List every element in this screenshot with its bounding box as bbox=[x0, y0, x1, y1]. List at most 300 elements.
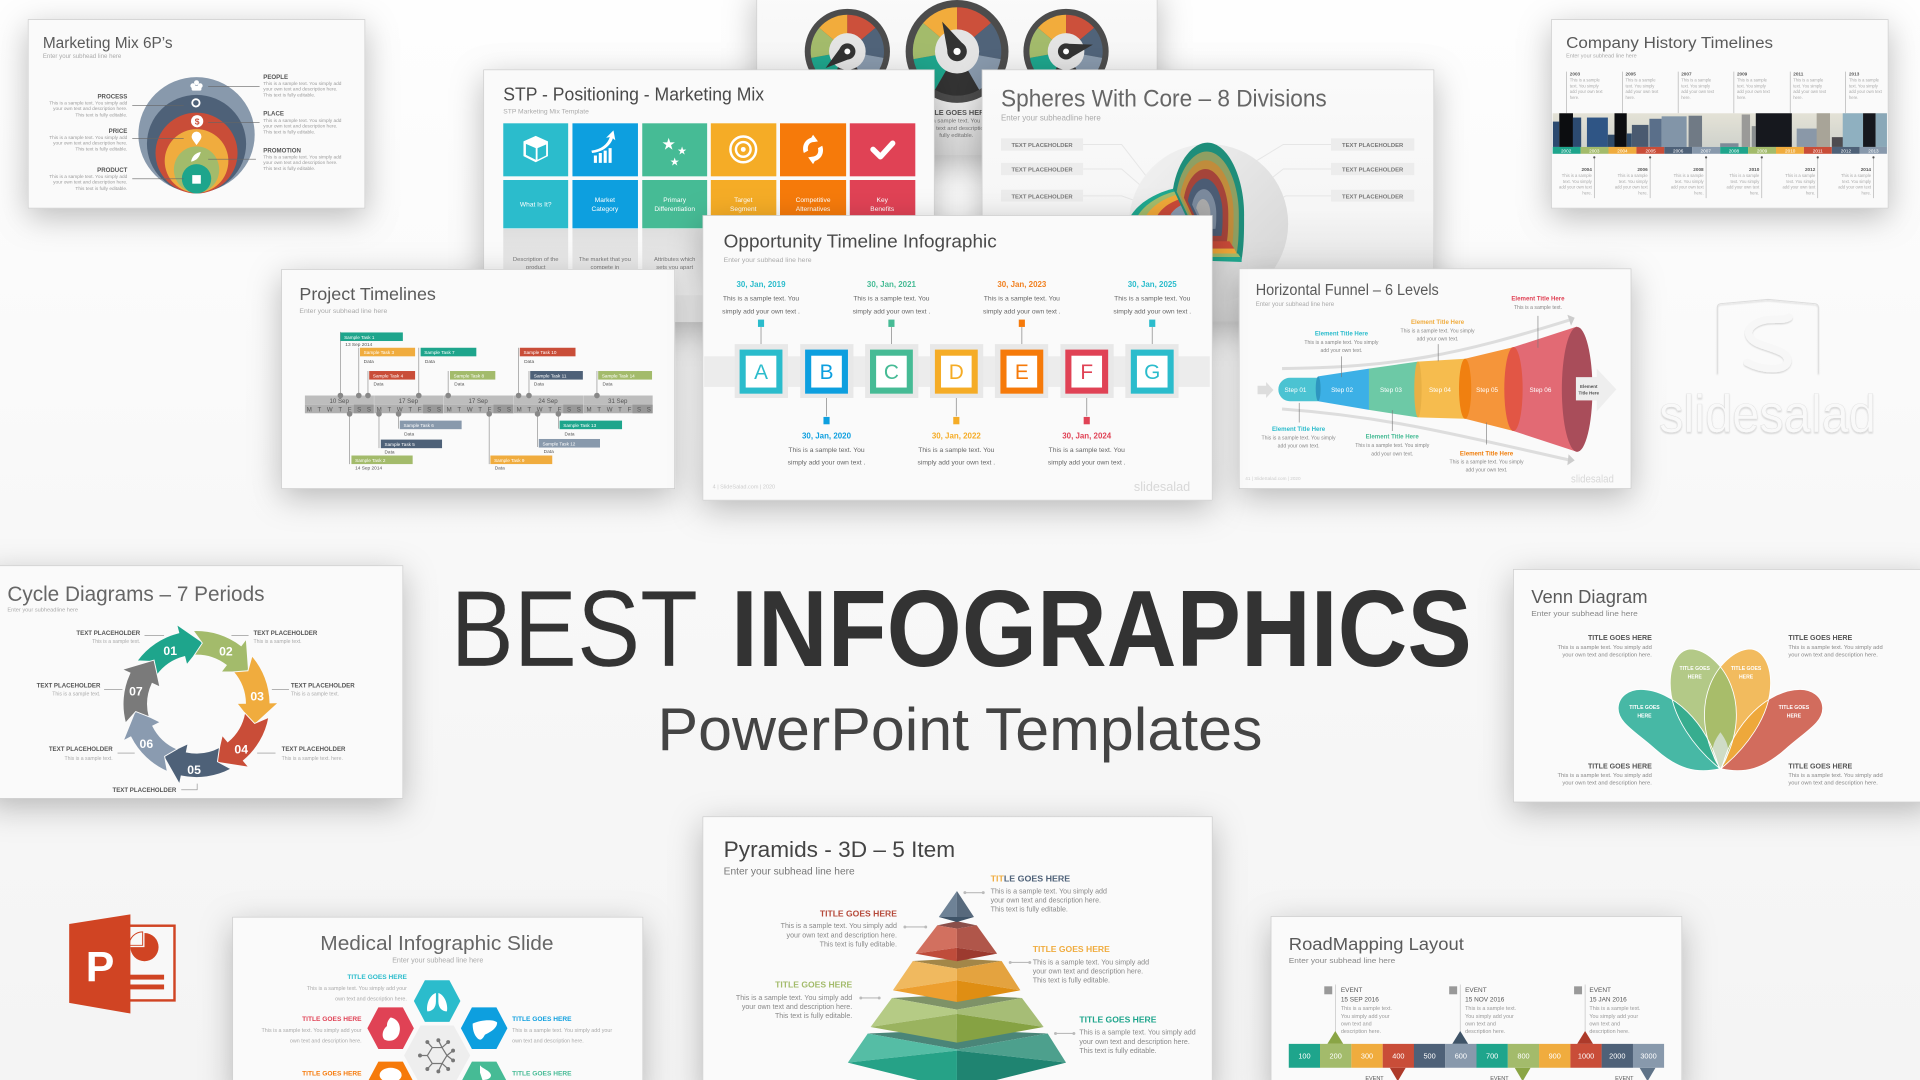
top timeline entries: add your own text bbox=[1681, 89, 1715, 94]
pyramid captions: This is a sample text. You simply add bbox=[1033, 958, 1149, 966]
bottom timeline entries: This is a sample bbox=[1674, 173, 1704, 178]
bottom timeline entries: here. bbox=[1806, 191, 1815, 196]
project timelines subheading: Enter your subhead line here bbox=[299, 308, 387, 315]
cycle labels: This is a sample text. bbox=[253, 639, 302, 645]
top timeline entries: This is a sample bbox=[1849, 77, 1880, 82]
STP subheading: STP Marketing Mix Template bbox=[503, 108, 589, 115]
bottom timeline entries: here. bbox=[1862, 191, 1871, 196]
STP icon tiles: ★ bbox=[670, 156, 680, 168]
right side labels: PEOPLE bbox=[263, 74, 288, 81]
roadmap subheading: Enter your subhead line here bbox=[1289, 956, 1395, 965]
upper date captions: 30, Jan, 2025 bbox=[1128, 280, 1177, 289]
funnel bottom callouts: This is a sample text. You simply bbox=[1355, 443, 1430, 449]
roadmap events bbox=[1324, 984, 1641, 1035]
top timeline entries: 2013 bbox=[1849, 71, 1860, 76]
right side labels bbox=[208, 74, 342, 172]
gauge caption bbox=[911, 108, 1002, 139]
pyramid captions: TITLE GOES HERE bbox=[1079, 1014, 1157, 1024]
left side labels: PROCESS bbox=[97, 94, 127, 101]
upper task bars: Data bbox=[454, 382, 465, 388]
lower task bars: Data bbox=[495, 466, 505, 472]
pyramid captions: This is a sample text. You simply add bbox=[991, 887, 1107, 895]
cycle labels: TEXT PLACEHOLDER bbox=[76, 630, 141, 637]
upper task bars: Sample Task 11 bbox=[534, 373, 567, 378]
STP description columns: Attributes which bbox=[654, 257, 695, 263]
medical subheading: Enter your subhead line here bbox=[392, 956, 483, 964]
top timeline entries: text. You simply bbox=[1793, 83, 1823, 88]
calendar axis: MTWTFSSMTWTFSSMTWTFSSMTWTFSSMTWTFSS bbox=[307, 406, 651, 413]
calendar axis: 17 Sep bbox=[468, 398, 488, 405]
funnel bottom callouts: Element Title Here bbox=[1366, 433, 1419, 440]
panel: gauges slide bbox=[757, 0, 1157, 156]
cycle heading: Cycle Diagrams – 7 Periods bbox=[7, 583, 264, 606]
upper date captions: This is a sample text. You bbox=[853, 296, 930, 303]
STP heading: STP - Positioning - Marketing Mix bbox=[503, 83, 764, 104]
funnel bottom callouts: add your own text. bbox=[1278, 444, 1320, 450]
left side labels: This text is fully editable. bbox=[75, 112, 127, 118]
panel: cycle diagrams bbox=[0, 566, 403, 798]
top timeline entries: text. You simply bbox=[1737, 83, 1767, 88]
upper date captions: 30, Jan, 2023 bbox=[997, 280, 1047, 289]
upper date captions bbox=[722, 280, 1191, 315]
STP label tiles: Segment bbox=[730, 206, 757, 213]
roadmap events: This is a sample text. bbox=[1341, 1006, 1392, 1012]
left side labels: your own text and description here. bbox=[53, 140, 127, 146]
letter tiles A to G: F bbox=[1080, 361, 1093, 384]
year colour strip: 2005 bbox=[1645, 148, 1656, 153]
year colour strip: 2007 bbox=[1701, 148, 1711, 153]
roadmap value bar: 200 bbox=[1330, 1052, 1342, 1061]
bottom timeline entries: text. You simply bbox=[1842, 179, 1872, 184]
pyramid captions: your own text and description here. bbox=[787, 931, 897, 939]
lower date captions bbox=[788, 431, 1126, 467]
tier 3 orange bbox=[893, 959, 1020, 1002]
funnel stages: Step 06 bbox=[1529, 387, 1552, 394]
project timelines heading: Project Timelines bbox=[299, 284, 436, 304]
bottom timeline entries: 2006 bbox=[1637, 167, 1648, 172]
roadmap heading: RoadMapping Layout bbox=[1289, 934, 1464, 954]
cycle ring arrows: 05 bbox=[187, 763, 201, 777]
panel: roadmapping layout bbox=[1271, 917, 1682, 1080]
STP description columns bbox=[503, 229, 915, 295]
medical captions: TITLE GOES HERE bbox=[302, 1016, 362, 1023]
roadmap events: This is a sample text. bbox=[1589, 1006, 1641, 1012]
roadmap events: own text and bbox=[1465, 1021, 1496, 1027]
top timeline entries: here. bbox=[1626, 95, 1635, 100]
opportunity watermark: slidesalad bbox=[1134, 479, 1190, 494]
STP label tiles: Differentiation bbox=[654, 206, 695, 213]
bottom timeline entries: 2014 bbox=[1861, 167, 1871, 172]
venn captions bbox=[1558, 634, 1883, 786]
right side labels: This text is fully editable. bbox=[263, 93, 315, 99]
opportunity subheading: Enter your subhead line here bbox=[724, 257, 812, 264]
venn captions: This is a sample text. You simply add bbox=[1558, 645, 1652, 651]
sphere labels: TEXT PLACEHOLDER bbox=[1342, 194, 1404, 200]
calendar axis: 31 Sep bbox=[608, 398, 628, 405]
pyramid heading: Pyramids - 3D – 5 Item bbox=[724, 837, 955, 862]
left side labels: This text is fully editable. bbox=[75, 186, 127, 192]
letter tiles A to G: A bbox=[754, 361, 768, 384]
upper task bars: Sample Task 7 bbox=[424, 350, 455, 355]
STP icon tiles bbox=[503, 123, 915, 176]
STP label tiles: Target bbox=[734, 197, 753, 204]
funnel bottom callouts: This is a sample text. You simply bbox=[1262, 436, 1336, 442]
right side labels: PROMOTION bbox=[263, 147, 301, 154]
tier 5 teal bbox=[848, 1030, 1066, 1080]
roadmap value bar: 900 bbox=[1549, 1052, 1561, 1061]
pyramid captions: your own text and description here. bbox=[742, 1003, 852, 1011]
top timeline entries: add your own text bbox=[1626, 89, 1659, 94]
bottom timeline entries: add your own text bbox=[1782, 185, 1816, 190]
bottom timeline entries: here. bbox=[1750, 191, 1759, 196]
bottom timeline entries: text. You simply bbox=[1730, 179, 1760, 184]
right side labels: your own text and description here. bbox=[263, 123, 337, 129]
panel: medical infographic bbox=[233, 917, 643, 1080]
lower task bars: Data bbox=[544, 449, 554, 455]
left side labels: This is a sample text. You simply add bbox=[49, 174, 128, 180]
funnel footer: 41 | SlideSalad.com | 2020 bbox=[1245, 476, 1301, 481]
cycle labels bbox=[37, 630, 355, 794]
sphere labels: TEXT PLACEHOLDER bbox=[1011, 143, 1073, 149]
letter tiles A to G: D bbox=[949, 361, 964, 384]
top timeline entries: here. bbox=[1793, 95, 1803, 100]
sphere with cut-away core bbox=[1129, 143, 1288, 303]
STP label tiles: Alternatives bbox=[796, 206, 831, 213]
top timeline entries: text. You simply bbox=[1681, 83, 1711, 88]
roadmap value bar: 2000 bbox=[1609, 1052, 1625, 1061]
roadmap events: You simply add your bbox=[1589, 1014, 1638, 1020]
top timeline entries: add your own text bbox=[1570, 89, 1603, 94]
bottom timeline entries: This is a sample bbox=[1729, 173, 1760, 178]
right side labels: PLACE bbox=[263, 111, 284, 118]
sphere labels: TEXT PLACEHOLDER bbox=[1011, 167, 1073, 173]
bottom timeline entries: text. You simply bbox=[1619, 179, 1649, 184]
top timeline entries: here. bbox=[1737, 95, 1746, 100]
STP description columns: Description of the bbox=[513, 257, 559, 263]
venn petals: TITLE GOES bbox=[1679, 666, 1711, 672]
bottom timeline entries: text. You simply bbox=[1563, 179, 1593, 184]
roadmap events: EVENT bbox=[1341, 987, 1362, 994]
company history subheading: Enter your subhead line here bbox=[1566, 54, 1637, 60]
roadmap value bar: 100 bbox=[1298, 1052, 1311, 1061]
lower task bars: Data bbox=[384, 450, 395, 456]
opportunity heading: Opportunity Timeline Infographic bbox=[724, 230, 997, 251]
medical captions: This is a sample text. You simply add your bbox=[261, 1028, 362, 1034]
funnel stages: Step 05 bbox=[1476, 387, 1499, 394]
STP label tiles bbox=[503, 180, 915, 228]
year colour strip: 2011 bbox=[1813, 148, 1823, 153]
venn petals: TITLE GOES bbox=[1629, 705, 1660, 711]
letter tiles A to G bbox=[735, 344, 1179, 398]
title: best infographics: BEST bbox=[451, 568, 698, 689]
pyramid captions: This text is fully editable. bbox=[775, 1012, 852, 1020]
top timeline entries: text. You simply bbox=[1626, 83, 1655, 88]
cycle ring arrows: 02 bbox=[219, 645, 233, 659]
pyramid captions: TITLE GOES HERE bbox=[775, 979, 853, 989]
top timeline entries: 2007 bbox=[1681, 71, 1692, 76]
medical heading: Medical Infographic Slide bbox=[320, 933, 553, 955]
upper date captions: simply add your own text . bbox=[722, 308, 800, 315]
stems and markers bbox=[758, 320, 1155, 424]
cycle ring arrows: 01 bbox=[163, 644, 177, 658]
year colour strip bbox=[1553, 147, 1887, 154]
upper date captions: simply add your own text . bbox=[853, 308, 930, 315]
top timeline entries: here. bbox=[1681, 95, 1691, 100]
spheres subheading: Enter your subheadline here bbox=[1001, 114, 1101, 123]
upper date captions: simply add your own text . bbox=[983, 308, 1061, 315]
pyramid captions: TITLE GOES HERE bbox=[820, 908, 897, 918]
year colour strip: 2010 bbox=[1785, 148, 1796, 153]
pyramid captions: TITLE GOES HERE bbox=[1033, 944, 1110, 954]
roadmap markers bbox=[1327, 1031, 1656, 1080]
panel: 3D pyramid bbox=[703, 817, 1212, 1080]
pyramid captions: This text is fully editable. bbox=[1079, 1047, 1157, 1055]
bottom timeline entries: 2012 bbox=[1805, 167, 1816, 172]
gauge caption: your own text and description here. bbox=[911, 126, 1002, 132]
upper date captions: simply add your own text . bbox=[1113, 308, 1191, 315]
funnel stages: Step 01 bbox=[1285, 387, 1307, 394]
upper task bars: Sample Task 3 bbox=[364, 350, 394, 355]
roadmap value bar: 300 bbox=[1361, 1052, 1373, 1061]
top timeline entries: 2005 bbox=[1626, 71, 1636, 76]
funnel top callouts bbox=[1304, 296, 1565, 377]
roadmap value bar: 3000 bbox=[1640, 1052, 1657, 1061]
top timeline entries: 2011 bbox=[1793, 71, 1804, 76]
medical captions: own text and description here. bbox=[335, 996, 407, 1002]
funnel bottom callouts bbox=[1262, 403, 1524, 473]
letter tiles A to G: E bbox=[1015, 361, 1029, 384]
pyramid tiers bbox=[848, 891, 1066, 1080]
bottom timeline entries: add your own text bbox=[1727, 185, 1760, 190]
medical captions: TITLE GOES HERE bbox=[512, 1016, 572, 1023]
venn petals: HERE bbox=[1787, 714, 1802, 720]
lower date captions: 30, Jan, 2022 bbox=[932, 431, 981, 440]
title: best infographics: INFOGRAPHICS bbox=[731, 568, 1472, 689]
year colour strip: 2006 bbox=[1673, 148, 1684, 153]
funnel top callouts: Element Title Here bbox=[1315, 331, 1369, 338]
upper task bars: Data bbox=[364, 359, 374, 365]
pyramid subheading: Enter your subhead line here bbox=[724, 866, 855, 877]
pyramid captions: your own text and description here. bbox=[1079, 1038, 1190, 1046]
cycle labels: This is a sample text. bbox=[291, 692, 339, 698]
lower task bars: Sample Task 13 bbox=[563, 423, 597, 428]
roadmap value bar: 1000 bbox=[1578, 1052, 1594, 1061]
venn petals: TITLE GOES bbox=[1731, 666, 1762, 672]
medical captions: TITLE GOES HERE bbox=[512, 1071, 572, 1078]
lower date captions: This is a sample text. You bbox=[788, 447, 865, 454]
bottom timeline entries: add your own text bbox=[1615, 185, 1649, 190]
calendar axis: 24 Sep bbox=[538, 398, 558, 405]
lower task bars bbox=[347, 411, 622, 472]
medical captions: This is a sample text. You simply add your bbox=[512, 1028, 612, 1034]
medical captions: own text and description here. bbox=[290, 1039, 362, 1045]
top timeline entries: This is a sample bbox=[1681, 77, 1712, 82]
roadmap events: own text and bbox=[1589, 1021, 1620, 1027]
cycle labels: This is a sample text. bbox=[65, 756, 113, 762]
medical captions: This is a sample text. You simply add your bbox=[307, 986, 407, 992]
top timeline entries: This is a sample bbox=[1626, 77, 1656, 82]
bottom timeline entries: 2008 bbox=[1693, 167, 1704, 172]
venn captions: TITLE GOES HERE bbox=[1788, 634, 1852, 642]
STP label tiles: Competitive bbox=[796, 197, 831, 204]
top timeline entries: add your own text bbox=[1793, 89, 1827, 94]
lower task bars: Data bbox=[564, 431, 575, 437]
venn captions: your own text and description here. bbox=[1788, 780, 1878, 786]
panel: opportunity timeline bbox=[703, 216, 1212, 500]
top timeline entries: add your own text bbox=[1849, 89, 1883, 94]
venn captions: your own text and description here. bbox=[1562, 652, 1652, 658]
top timeline entries bbox=[1567, 71, 1883, 113]
cycle labels: This is a sample text. bbox=[52, 692, 100, 698]
venn heading: Venn Diagram bbox=[1531, 586, 1648, 607]
gauge caption: This is a sample text. You simply bbox=[914, 118, 999, 124]
roadmap value bar: 800 bbox=[1517, 1052, 1530, 1061]
logo: slidesalad embossed bbox=[1659, 299, 1876, 444]
STP label tiles: What Is It? bbox=[520, 201, 552, 208]
lower date captions: This is a sample text. You bbox=[918, 447, 995, 454]
roadmap events: You simply add your bbox=[1341, 1014, 1390, 1020]
marketing mix subheading: Enter your subhead line here bbox=[43, 53, 122, 60]
gauge right bbox=[1023, 9, 1109, 94]
upper task bars: Data bbox=[524, 359, 534, 365]
upper date captions: This is a sample text. You bbox=[984, 296, 1060, 303]
funnel top callouts: This is a sample text. You simply bbox=[1304, 340, 1379, 346]
roadmap value bar: 600 bbox=[1455, 1052, 1467, 1061]
bottom timeline entries: here. bbox=[1694, 191, 1704, 196]
pyramid captions: This is a sample text. You simply add bbox=[781, 922, 897, 930]
lower date captions: simply add your own text . bbox=[1048, 460, 1126, 467]
funnel stages: Step 02 bbox=[1331, 387, 1353, 394]
tier 1 apex bbox=[939, 891, 974, 922]
medical captions bbox=[261, 974, 612, 1078]
left side labels: PRICE bbox=[109, 128, 127, 135]
funnel watermark: slidesalad bbox=[1571, 473, 1614, 485]
upper task bars: Data bbox=[602, 382, 613, 388]
company history heading: Company History Timelines bbox=[1566, 35, 1773, 52]
upper date captions: This is a sample text. You bbox=[1114, 296, 1191, 303]
city skyline image band bbox=[1553, 113, 1887, 147]
venn petals: HERE bbox=[1739, 674, 1754, 680]
funnel stages bbox=[1278, 326, 1602, 452]
cycle labels: TEXT PLACEHOLDER bbox=[37, 683, 101, 690]
STP label tiles: Primary bbox=[663, 197, 687, 204]
gauge left bbox=[805, 9, 890, 94]
lower date captions: This is a sample text. You bbox=[1049, 447, 1125, 454]
flow curves and arrows bbox=[1258, 315, 1616, 465]
roadmap events: description here. bbox=[1341, 1029, 1382, 1035]
year colour strip: 2002 bbox=[1561, 148, 1572, 153]
left side labels: This text is fully editable. bbox=[75, 147, 127, 153]
gauge middle bbox=[906, 0, 1008, 103]
upper task bars: Data bbox=[425, 359, 435, 365]
top timeline entries: This is a sample bbox=[1793, 77, 1824, 82]
roadmap events: 15 JAN 2016 bbox=[1589, 997, 1627, 1004]
top timeline entries: This is a sample bbox=[1737, 77, 1768, 82]
gauge caption: TITLE GOES HERE bbox=[923, 108, 989, 117]
top timeline entries: here. bbox=[1849, 95, 1858, 100]
funnel subheading: Enter your subhead line here bbox=[1256, 301, 1335, 308]
spheres heading: Spheres With Core – 8 Divisions bbox=[1001, 86, 1327, 113]
venn subheading: Enter your subhead line here bbox=[1531, 609, 1638, 618]
bottom timeline entries: here. bbox=[1582, 191, 1592, 196]
STP description columns: The market that you bbox=[579, 257, 631, 263]
cycle labels: This is a sample text. bbox=[92, 639, 140, 645]
cycle ring arrows: 07 bbox=[129, 685, 143, 699]
hexagon cluster bbox=[367, 980, 507, 1080]
roadmap events: description here. bbox=[1589, 1029, 1630, 1035]
bottom timeline entries: add your own text bbox=[1838, 185, 1872, 190]
pyramid captions bbox=[736, 873, 1196, 1055]
cycle ring arrows bbox=[111, 617, 282, 784]
roadmap value bar: 400 bbox=[1392, 1052, 1404, 1061]
medical captions: own text and description here. bbox=[512, 1039, 584, 1045]
left side labels: This is a sample text. You simply add bbox=[49, 101, 128, 107]
bottom timeline entries: 2010 bbox=[1749, 167, 1760, 172]
panel: spheres with core bbox=[982, 70, 1434, 322]
funnel bottom callouts: Element Title Here bbox=[1272, 426, 1326, 433]
year colour strip: 2012 bbox=[1841, 148, 1851, 153]
calendar axis: 17 Sep bbox=[399, 398, 419, 405]
sphere labels: TEXT PLACEHOLDER bbox=[1011, 194, 1073, 200]
year colour strip: 2004 bbox=[1617, 148, 1628, 153]
tier 4 green bbox=[871, 995, 1044, 1043]
venn petals: HERE bbox=[1688, 674, 1702, 680]
upper task bars: Sample Task 10 bbox=[523, 350, 557, 355]
calendar axis: 10 Sep bbox=[329, 398, 349, 405]
left side labels: PRODUCT bbox=[97, 167, 128, 174]
funnel stages: Title Here bbox=[1579, 390, 1600, 395]
bottom timeline entries bbox=[1559, 156, 1875, 198]
STP label tiles: Category bbox=[591, 206, 619, 213]
panel: STP positioning marketing mix bbox=[484, 70, 934, 322]
venn petals bbox=[1618, 649, 1823, 771]
left side labels bbox=[49, 94, 184, 192]
roadmap events: description here. bbox=[1465, 1029, 1506, 1035]
venn captions: This is a sample text. You simply add bbox=[1558, 773, 1652, 779]
funnel stages: Step 03 bbox=[1380, 387, 1402, 394]
roadmap events: You simply add your bbox=[1465, 1014, 1514, 1020]
left side labels: your own text and description here. bbox=[53, 180, 127, 186]
upper task bars: Sample Task 14 bbox=[602, 373, 635, 378]
pyramid captions: your own text and description here. bbox=[1033, 967, 1143, 975]
year colour strip: 2013 bbox=[1868, 148, 1879, 153]
top timeline entries: This is a sample bbox=[1570, 77, 1601, 82]
upper task bars: Data bbox=[373, 382, 384, 388]
funnel heading: Horizontal Funnel – 6 Levels bbox=[1256, 282, 1439, 299]
timeline band bbox=[704, 356, 1210, 387]
top timeline entries: 2009 bbox=[1737, 71, 1748, 76]
pyramid captions: This text is fully editable. bbox=[1033, 977, 1110, 985]
bottom timeline entries: This is a sample bbox=[1618, 173, 1648, 178]
top timeline entries: 2003 bbox=[1570, 71, 1581, 76]
roadmap value bar: 700 bbox=[1486, 1052, 1498, 1061]
logo: slidesalad embossed: slidesalad bbox=[1659, 385, 1876, 444]
bottom timeline entries: This is a sample bbox=[1841, 173, 1872, 178]
medical captions: TITLE GOES HERE bbox=[302, 1071, 362, 1078]
venn captions: your own text and description here. bbox=[1562, 780, 1652, 786]
panel: company history timelines bbox=[1551, 20, 1888, 208]
year colour strip: 2009 bbox=[1757, 148, 1768, 153]
sphere labels bbox=[1001, 138, 1414, 218]
roadmap value bar: 500 bbox=[1423, 1052, 1436, 1061]
right side labels: This is a sample text. You simply add bbox=[263, 81, 342, 87]
lower task bars: Sample Task 2 bbox=[355, 458, 386, 463]
bottom timeline entries: here. bbox=[1638, 191, 1648, 196]
upper task bars bbox=[338, 332, 652, 398]
letter tiles A to G: B bbox=[820, 361, 833, 384]
cycle subheading: Enter your subheadline here bbox=[7, 608, 78, 614]
opportunity footer: 4 | SlideSalad.com | 2020 bbox=[713, 485, 775, 491]
